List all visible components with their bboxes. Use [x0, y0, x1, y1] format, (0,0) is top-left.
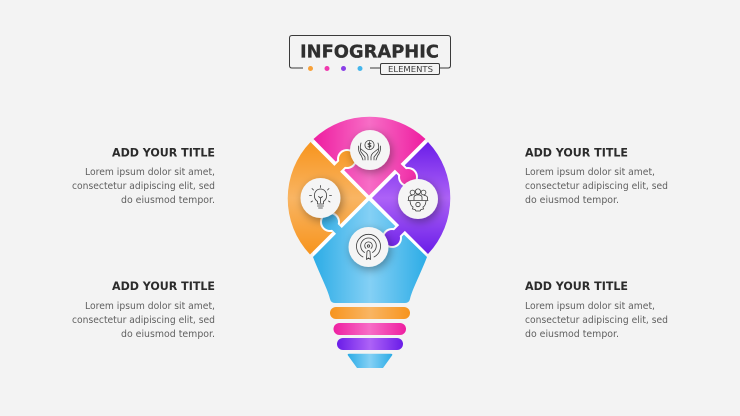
text block: bottom left: ADD YOUR TITLE [112, 279, 215, 293]
colour dots [308, 66, 362, 71]
icon badge: signal broadcast [348, 227, 388, 267]
knob: pink into purple [396, 165, 418, 187]
text block: top right: ADD YOUR TITLE [525, 146, 628, 160]
text block: bottom right: Lorem ipsum dolor sit amet, [525, 301, 655, 312]
icon badge: hand holding dollar [350, 130, 390, 170]
light bulb puzzle [288, 117, 450, 368]
header: infographic elements title [290, 36, 450, 74]
text block: bottom left [72, 279, 215, 340]
screw band: pink [334, 323, 406, 335]
bulb tip: blue [348, 354, 392, 368]
text block: top right: do eiusmod tempor. [525, 195, 619, 206]
title frame [290, 36, 450, 68]
screw band: purple [337, 338, 403, 350]
puzzle piece: purple right [372, 142, 450, 254]
puzzle piece: pink top [314, 117, 426, 196]
icon badge: light bulb [300, 178, 340, 218]
text block: top right: consectetur adipiscing elit, sed [525, 181, 668, 192]
text block: bottom right: consectetur adipiscing elit, sed [525, 315, 668, 326]
puzzle piece: orange left [288, 142, 366, 254]
knob: blue into orange [320, 212, 342, 234]
knob: purple into blue [382, 226, 404, 248]
elements tag [380, 64, 440, 74]
text block: bottom left: Lorem ipsum dolor sit amet, [85, 301, 215, 312]
title text: INFOGRAPHIC [300, 42, 439, 62]
text block: top left: do eiusmod tempor. [121, 195, 215, 206]
elements tag: ELEMENTS [388, 65, 433, 74]
text block: bottom right: do eiusmod tempor. [525, 329, 619, 340]
text block: bottom left: do eiusmod tempor. [121, 329, 215, 340]
text block: top right: Lorem ipsum dolor sit amet, [525, 167, 655, 178]
text block: top left: ADD YOUR TITLE [112, 146, 215, 160]
puzzle piece: blue bulb base [313, 200, 427, 303]
knob: orange into pink [336, 149, 357, 170]
text block: bottom right [525, 279, 668, 340]
text block: bottom right: ADD YOUR TITLE [525, 279, 628, 293]
text block: top right [525, 146, 668, 206]
icon badge: team and gear [398, 179, 438, 219]
text block: bottom left: consectetur adipiscing elit, sed [72, 315, 215, 326]
text block: top left: Lorem ipsum dolor sit amet, [85, 167, 215, 178]
text block: top left [72, 146, 215, 206]
screw band: orange [330, 307, 410, 319]
text block: top left: consectetur adipiscing elit, sed [72, 181, 215, 192]
